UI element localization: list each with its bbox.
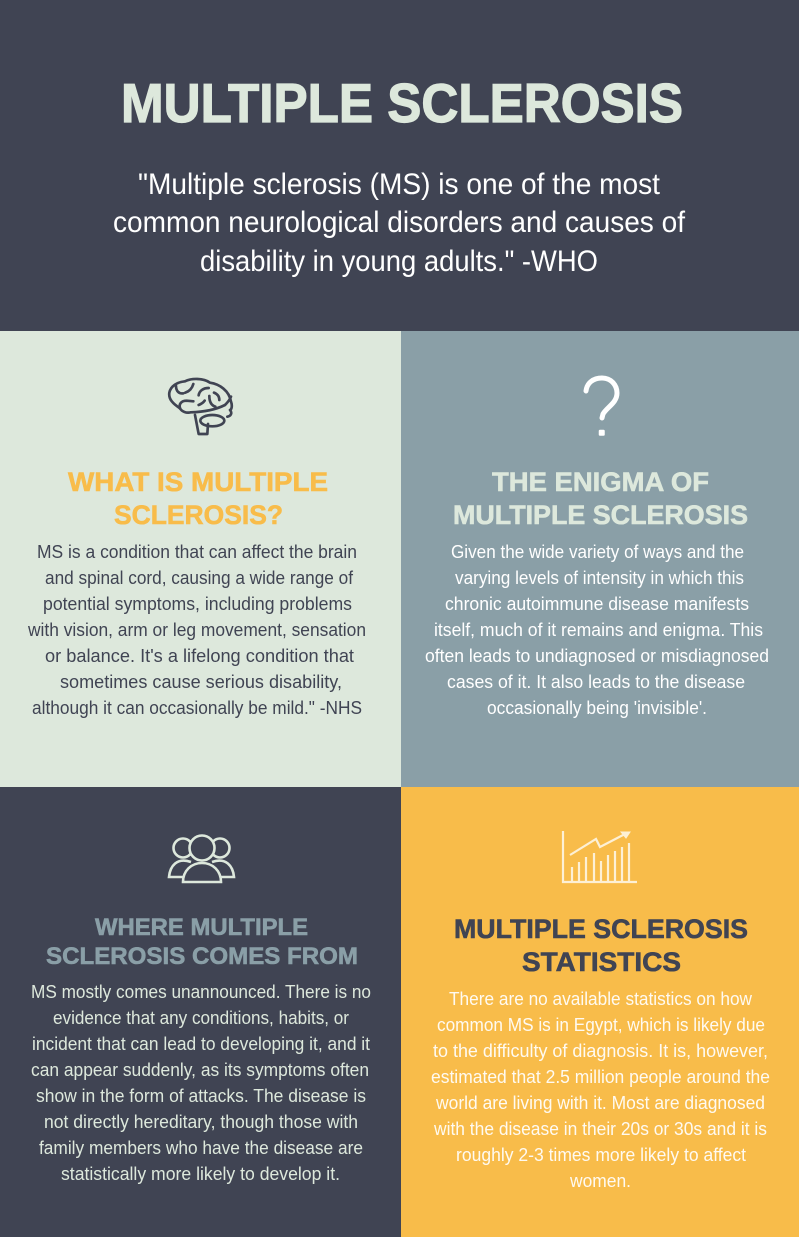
body text: often leads to undiagnosed or misdiagnosed — [425, 646, 769, 666]
heading: MULTIPLE SCLEROSIS — [453, 500, 748, 530]
body text — [27, 542, 366, 718]
body text: estimated that 2.5 million people around the — [431, 1067, 770, 1087]
body text: although it can occasionally be mild." -NHS — [32, 698, 362, 718]
body text: There are no available statistics on how — [449, 989, 753, 1009]
panel: header — [0, 0, 799, 331]
body text — [425, 542, 769, 718]
icon: chart — [563, 831, 637, 882]
heading: MULTIPLE SCLEROSIS — [454, 914, 748, 944]
body text: world are living with it. Most are diagnosed — [435, 1093, 765, 1113]
body text: potential symptoms, including problems — [43, 594, 352, 614]
heading: WHAT IS MULTIPLE — [68, 467, 328, 497]
icon: group of people — [169, 836, 234, 882]
quote text: disability in young adults." -WHO — [200, 245, 598, 278]
body text: cases of it. It also leads to the disease — [447, 672, 745, 692]
body text — [31, 982, 371, 1184]
body text: sometimes cause serious disability, — [60, 672, 342, 692]
body text: occasionally being 'invisible'. — [487, 698, 707, 718]
icon: question mark — [586, 378, 617, 434]
quote text: common neurological disorders and causes of — [113, 206, 686, 239]
body text: to the difficulty of diagnosis. It is, however, — [433, 1041, 768, 1061]
heading: SCLEROSIS? — [114, 500, 283, 530]
body text: show in the form of attacks. The disease is — [36, 1086, 366, 1106]
body text: MS mostly comes unannounced. There is no — [31, 982, 371, 1002]
body text: can appear suddenly, as its symptoms often — [31, 1060, 369, 1080]
body text: with the disease in their 20s or 30s and it is — [433, 1119, 767, 1139]
heading: WHERE MULTIPLE — [95, 914, 308, 941]
icon: brain — [169, 379, 232, 434]
body text: statistically more likely to develop it. — [61, 1164, 340, 1184]
heading — [454, 914, 748, 977]
panel: what is multiple sclerosis — [0, 331, 401, 787]
body text: chronic autoimmune disease manifests — [445, 594, 749, 614]
body text: women. — [569, 1171, 631, 1191]
body text — [431, 989, 770, 1191]
quote text — [113, 168, 686, 278]
heading — [453, 467, 748, 530]
body text: itself, much of it remains and enigma. This — [434, 620, 763, 640]
heading — [68, 467, 328, 530]
panel: the enigma — [401, 331, 799, 787]
body text: varying levels of intensity in which this — [455, 568, 744, 588]
heading: STATISTICS — [522, 947, 681, 977]
body text: MS is a condition that can affect the brain — [37, 542, 357, 562]
panel: where it comes from — [0, 787, 401, 1237]
body text: with vision, arm or leg movement, sensation — [27, 620, 366, 640]
body text: not directly hereditary, though those with — [44, 1112, 358, 1132]
body text: family members who have the disease are — [39, 1138, 363, 1158]
panel: statistics — [401, 787, 799, 1237]
heading: SCLEROSIS COMES FROM — [46, 943, 358, 970]
body text: Given the wide variety of ways and the — [451, 542, 744, 562]
body text: evidence that any conditions, habits, or — [53, 1008, 349, 1028]
body text: and spinal cord, causing a wide range of — [45, 568, 354, 588]
body text: incident that can lead to developing it, and it — [32, 1034, 370, 1054]
title: MULTIPLE SCLEROSIS — [121, 72, 683, 134]
heading — [46, 914, 358, 970]
body text: or balance. It's a lifelong condition that — [45, 646, 354, 666]
body text: common MS is in Egypt, which is likely due — [437, 1015, 765, 1035]
quote text: "Multiple sclerosis (MS) is one of the most — [138, 168, 661, 201]
heading: THE ENIGMA OF — [492, 467, 709, 497]
body text: roughly 2-3 times more likely to affect — [456, 1145, 746, 1165]
